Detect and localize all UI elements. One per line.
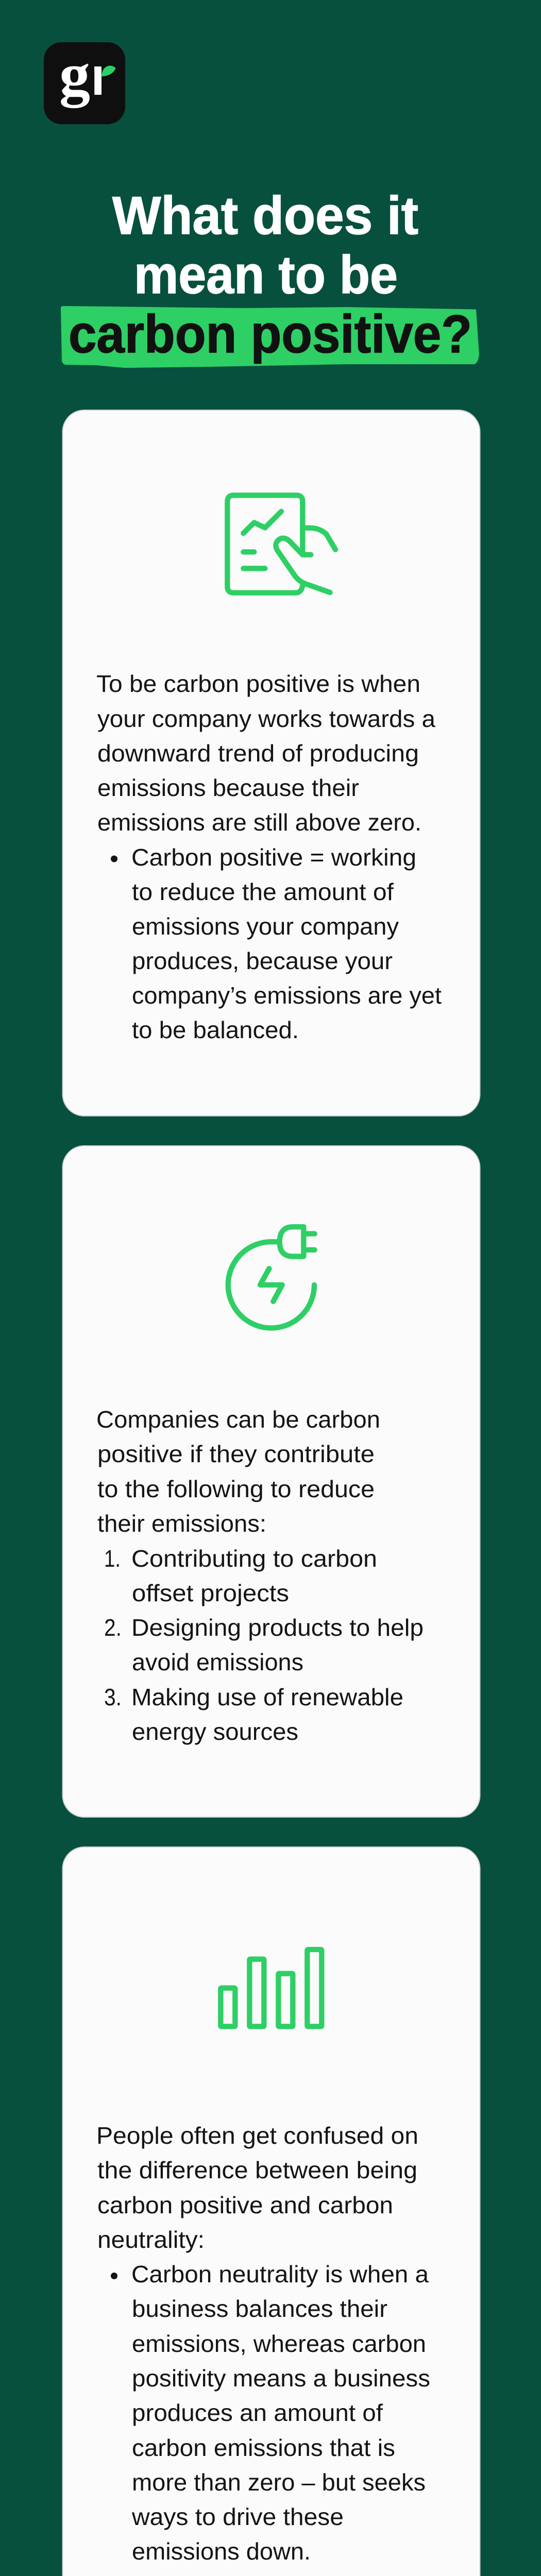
logo badge — [44, 41, 125, 124]
text: definition bullet: Carbon positive = working — [131, 844, 416, 871]
numbered list: avoid emissions — [132, 1649, 303, 1675]
title: mean to be — [134, 245, 398, 305]
text: comparison bullet: positivity means a business — [132, 2365, 430, 2392]
text: intro paragraph: the difference between being — [97, 2157, 417, 2183]
text: definition paragraph: emissions because their — [97, 774, 359, 801]
text: comparison bullet: ways to drive these — [131, 2503, 344, 2530]
title — [61, 186, 479, 368]
text: definition bullet: to reduce the amount of — [132, 878, 394, 905]
text: intro paragraph: to the following to reduce — [97, 1476, 375, 1502]
numbered list: energy sources — [132, 1718, 298, 1745]
panel: comparison with carbon neutrality card — [62, 1846, 480, 2576]
bullet marker — [111, 2273, 117, 2279]
text: comparison bullet: emissions, whereas carbon — [132, 2330, 426, 2357]
panel: definition card — [62, 410, 480, 1116]
text: definition paragraph: your company works towards a — [97, 705, 435, 732]
numbered list — [104, 1545, 424, 1745]
text: definition bullet: emissions your company — [132, 913, 399, 940]
icon: plug with lightning bolt — [228, 1227, 315, 1328]
text: comparison bullet: Carbon neutrality is when a — [131, 2261, 429, 2287]
panel: how to be carbon positive card — [62, 1145, 480, 1818]
title: What does it — [112, 186, 418, 246]
numbered list: offset projects — [132, 1580, 289, 1606]
text: definition paragraph: emissions are still above zero. — [97, 809, 421, 836]
text: intro paragraph — [96, 1406, 380, 1537]
text: comparison bullet: produces an amount of — [132, 2399, 383, 2426]
text: definition paragraph: downward trend of producing — [97, 740, 419, 767]
text: intro paragraph — [96, 2122, 418, 2253]
numbered list: Designing products to help — [131, 1614, 424, 1641]
text: comparison bullet: carbon emissions that is — [132, 2434, 395, 2461]
logo badge: r — [91, 47, 111, 107]
numbered list: 1. — [104, 1545, 121, 1572]
numbered list: Contributing to carbon — [131, 1545, 377, 1572]
text: definition bullet: produces, because your — [132, 947, 393, 974]
text: comparison bullet — [131, 2261, 430, 2565]
text: definition paragraph — [96, 670, 435, 836]
numbered list: 3. — [104, 1684, 122, 1710]
text: intro paragraph: Companies can be carbon — [96, 1406, 380, 1433]
text: intro paragraph: carbon positive and carbon — [97, 2192, 393, 2218]
text: comparison bullet: business balances their — [132, 2295, 387, 2322]
text: intro paragraph: People often get confused on — [96, 2122, 418, 2149]
text: intro paragraph: positive if they contribute — [97, 1440, 375, 1467]
title: carbon positive? — [69, 304, 472, 364]
icon: document with chart held by hand — [227, 495, 335, 593]
icon: bar chart — [221, 1950, 322, 2026]
text: intro paragraph: neutrality: — [97, 2226, 205, 2253]
text: comparison bullet: more than zero – but seeks — [132, 2469, 426, 2496]
text: definition bullet: company’s emissions are yet — [132, 982, 442, 1009]
header: logo badge and title — [44, 41, 479, 368]
text: definition bullet — [131, 844, 442, 1043]
bullet marker — [111, 855, 117, 862]
title highlight swash — [61, 306, 479, 368]
logo badge: g — [59, 41, 90, 108]
text: definition paragraph: To be carbon positive is when — [96, 670, 420, 697]
text: comparison bullet: emissions down. — [132, 2538, 311, 2565]
text: definition bullet: to be balanced. — [132, 1016, 299, 1043]
numbered list: 2. — [104, 1614, 122, 1641]
text: intro paragraph: their emissions: — [97, 1510, 266, 1537]
numbered list: Making use of renewable — [131, 1684, 403, 1710]
